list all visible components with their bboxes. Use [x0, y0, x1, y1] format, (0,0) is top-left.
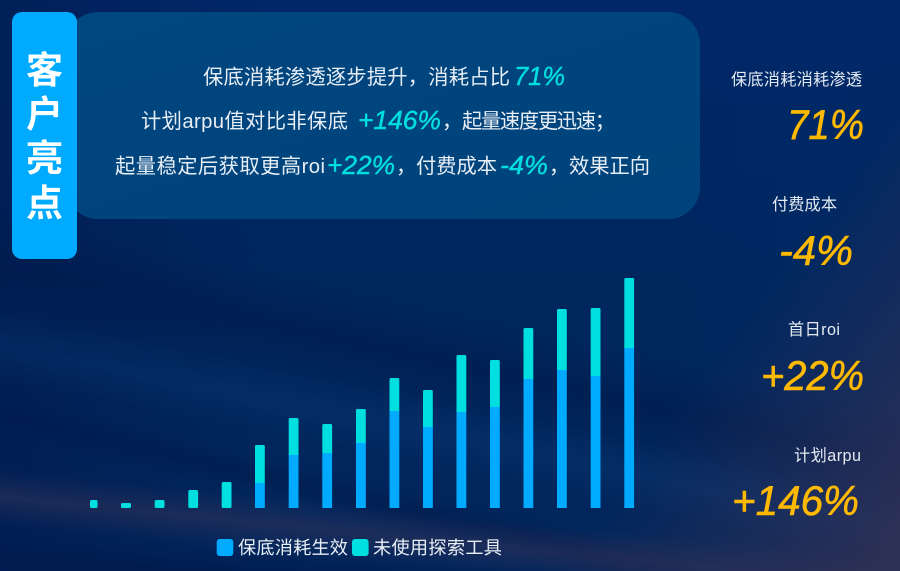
text block: summary line 3: 效果正向	[569, 155, 650, 178]
panel: customer highlights label	[12, 12, 77, 259]
series: 保底消耗生效	[255, 348, 634, 508]
legend item: 未使用探索工具: 未使用探索工具	[373, 538, 502, 558]
text block: summary line 3: -4%	[500, 150, 548, 180]
text block: summary line 1	[203, 61, 565, 91]
stat: 保底消耗消耗渗透: 71%	[787, 101, 864, 148]
stat: 计划arpu: 计划arpu	[794, 447, 861, 465]
text block: summary line 3: 付费成本	[416, 155, 497, 178]
text block: summary line 3: ，	[549, 156, 569, 178]
stat: 计划arpu: +146%	[732, 477, 859, 524]
heading: customer highlights: 点	[26, 183, 63, 224]
text block: summary line 3: ，	[396, 156, 416, 178]
stat: 保底消耗消耗渗透	[731, 71, 864, 148]
text block: summary line 1: 71%	[514, 61, 565, 91]
legend	[217, 538, 502, 558]
heading: customer highlights: 亮	[26, 138, 63, 179]
stat: 首日roi: +22%	[761, 352, 864, 399]
text block: summary line 2: 起量速度更迅速；	[462, 110, 615, 133]
stat: 付费成本: 付费成本	[772, 196, 837, 214]
stat: 计划arpu	[732, 447, 861, 524]
stat: 保底消耗消耗渗透: 保底消耗消耗渗透	[731, 71, 862, 89]
stat: 付费成本	[772, 196, 853, 274]
text block: summary line 2: ，	[442, 111, 462, 133]
heading: customer highlights	[26, 50, 63, 224]
text block: summary line 3	[115, 150, 650, 180]
text block: summary line 3: 起量稳定后获取更高roi	[115, 155, 325, 178]
stat: 首日roi	[761, 321, 864, 399]
text block: summary line 2: 计划arpu值对比非保底	[141, 110, 348, 133]
stat: 首日roi: 首日roi	[788, 321, 840, 339]
text block: summary line 3: +22%	[327, 150, 395, 180]
stat: 付费成本: -4%	[779, 227, 853, 274]
text block: summary line 2: +146%	[358, 105, 441, 135]
series: 未使用探索工具	[90, 278, 634, 508]
legend item: 保底消耗生效: 保底消耗生效	[238, 538, 348, 558]
heading: customer highlights: 客	[26, 50, 63, 91]
panel: summary background	[66, 12, 700, 219]
text block: summary line 2	[141, 105, 615, 135]
text block: summary line 1: 保底消耗渗透逐步提升，消耗占比	[203, 66, 510, 89]
bar chart	[90, 278, 634, 508]
heading: customer highlights: 户	[26, 94, 63, 135]
